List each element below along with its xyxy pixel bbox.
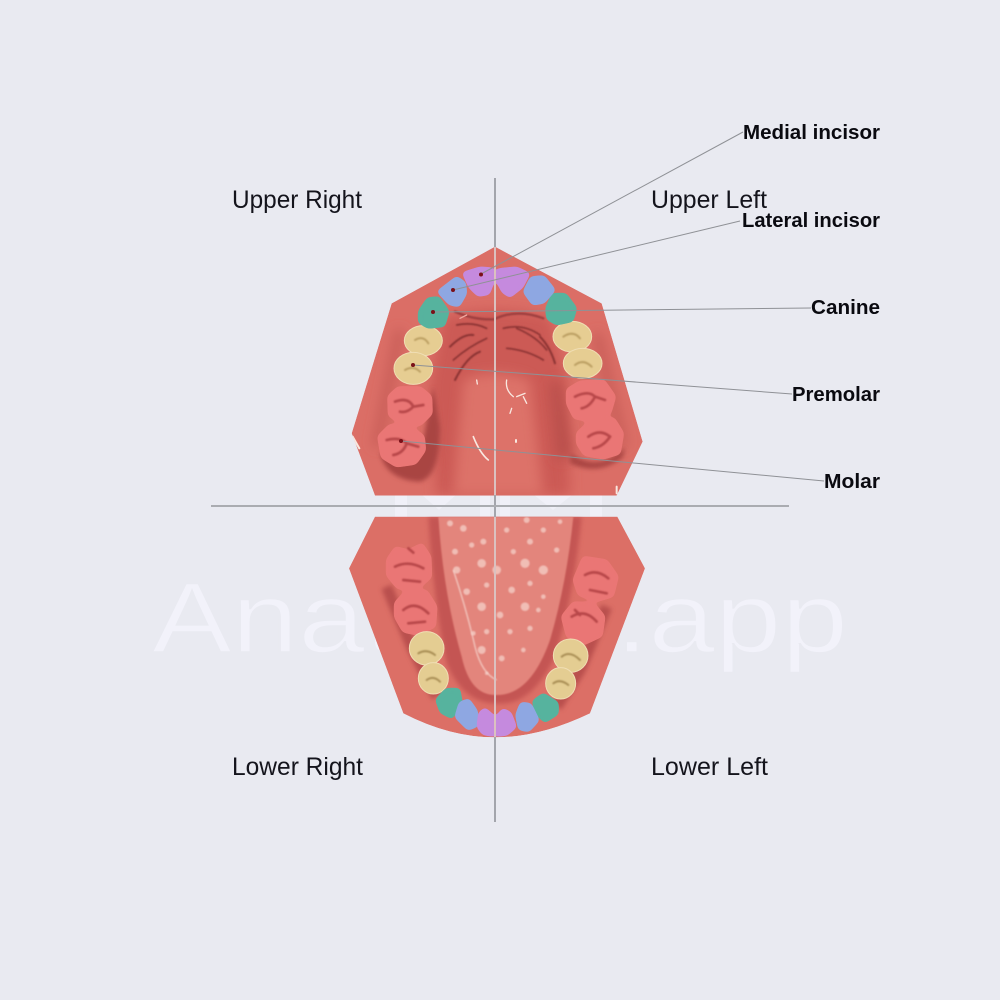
tongue speckles [447,517,562,675]
callout: molar: Molar [824,471,880,493]
premolars lower [409,632,588,699]
callout: medial incisor: Medial incisor [743,122,880,144]
lower dental arch [349,517,645,737]
lower gum [349,517,645,737]
medial incisors upper [464,268,528,296]
quadrant label: upper right: Upper Right [232,186,362,214]
upper dental arch [352,247,643,496]
callout: lateral incisor: Lateral incisor [742,210,880,232]
horizontal quadrant axis [211,505,789,507]
molars upper [379,381,622,465]
infographic canvas [154,124,880,822]
callout: premolar: Premolar [792,384,880,406]
palate ridges [450,312,555,380]
lateral incisors upper [439,277,553,305]
canines lower [437,690,557,721]
callout: premolar [411,363,880,406]
callout: canine [431,297,880,319]
tongue [428,517,582,704]
watermark: Anatomy.app [152,562,848,673]
gum shading [387,587,607,707]
molar details lower [395,548,608,623]
premolar details lower [418,651,580,685]
lateral incisors lower [457,701,537,730]
quadrant label: lower right: Lower Right [232,753,363,781]
vertical quadrant axis [494,178,496,822]
molars lower [388,545,617,643]
watermark [152,495,848,673]
upper gum [352,247,643,496]
quadrant label: lower left: Lower Left [651,753,768,781]
tongue highlight [453,570,497,680]
callout: molar [399,439,880,493]
palate highlights [353,315,617,493]
palate shading [377,310,625,496]
premolar details upper [405,334,592,372]
molar details upper [387,393,610,455]
canines upper [420,295,575,327]
medial incisors lower [478,709,515,735]
premolars upper [394,321,602,384]
callout: canine: Canine [811,297,880,319]
callout: medial incisor [479,122,880,276]
quadrant label: upper left: Upper Left [651,186,767,214]
callout: lateral incisor [451,210,880,292]
